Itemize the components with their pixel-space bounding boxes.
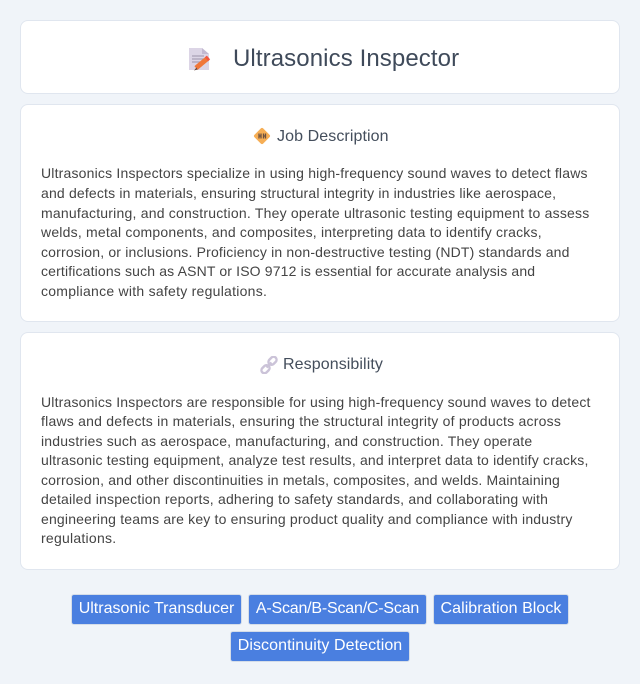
text block: responsibility: engineering teams are key to ensuring product quality and compliance with industry (41, 511, 572, 527)
tag: Ultrasonic Transducer: Ultrasonic Transducer (79, 600, 234, 617)
tag: A-Scan/B-Scan/C-Scan (248, 594, 427, 625)
heading: job description: Job Description (277, 128, 389, 145)
panel: title card (20, 20, 620, 94)
tag: Ultrasonic Transducer (71, 594, 242, 625)
text block: responsibility: Ultrasonics Inspectors are responsible for using high-frequency sound waves to detect (41, 394, 591, 410)
text block: responsibility: regulations. (41, 530, 116, 546)
heading: responsibility: Responsibility (283, 356, 383, 373)
text block: job description: compliance with safety regulations. (41, 283, 267, 299)
text block: job description (41, 165, 589, 299)
text block: responsibility: flaws and defects in materials, ensuring the structural integrity of products across (41, 413, 561, 429)
text block: responsibility: industries such as aerospace, manufacturing, and construction. They operate (41, 433, 532, 449)
text block: job description: and defects in materials, ensuring structural integrity in industries like aerospace, (41, 185, 556, 201)
tag: Discontinuity Detection: Discontinuity Detection (238, 637, 402, 654)
text block: job description: corrosion, or inclusions. Proficiency in non-destructive testing (NDT) standards and (41, 244, 570, 260)
text block: responsibility (41, 394, 591, 546)
text block: job description: manufacturing, and construction. They operate ultrasonic testing equipment to assess (41, 205, 589, 221)
icon: construction sign (254, 128, 270, 144)
text block: responsibility: ultrasonic testing equipment, analyze test results, and interpret data to identify cracks, (41, 452, 589, 468)
title: Ultrasonics Inspector (233, 45, 459, 72)
tag: Calibration Block (433, 594, 569, 625)
tag: A-Scan/B-Scan/C-Scan: A-Scan/B-Scan/C-Scan (256, 600, 419, 617)
tag: Calibration Block: Calibration Block (441, 600, 561, 617)
panel: job description (20, 104, 620, 322)
text block: job description: welds, metal components, and composites, interpreting data to identify cracks, (41, 224, 542, 240)
tag: Discontinuity Detection (230, 631, 410, 662)
panel: responsibility (20, 332, 620, 570)
text block: job description: Ultrasonics Inspectors specialize in using high-frequency sound waves to detect flaws (41, 165, 588, 181)
text block: responsibility: corrosion, and other discontinuities in metals, composites, and welds. Maintaining (41, 472, 560, 488)
icon: chain link (260, 356, 278, 374)
text block: job description: certifications such as ASNT or ISO 9712 is essential for accurate analysis and (41, 263, 535, 279)
text block: responsibility: detailed inspection reports, adhering to safety standards, and collaborating with (41, 491, 548, 507)
icon: document with pencil (189, 48, 210, 70)
